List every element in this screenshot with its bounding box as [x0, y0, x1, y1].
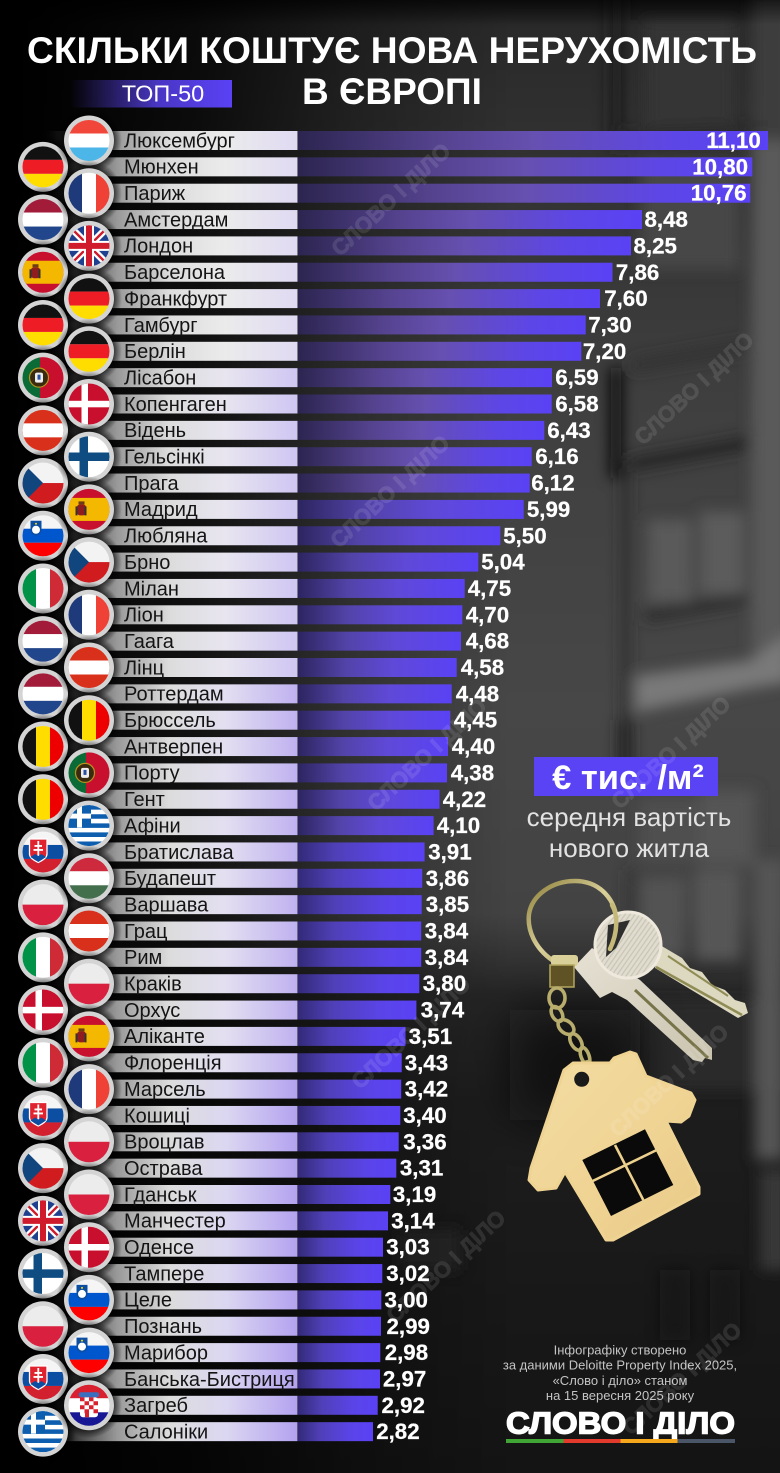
badge: ТОП-50: ТОП-50: [122, 81, 204, 107]
row: Гент: 4,22: [443, 787, 486, 812]
row: Прага: Прага: [124, 473, 179, 495]
flag: Denmark, Aarhus: [10, 977, 76, 1043]
row: Оденсе: [40, 1235, 430, 1260]
watermarks: СЛОВО І ДІЛО: [606, 691, 735, 814]
row: Тампере: 3,02: [386, 1261, 430, 1286]
clasp: [550, 955, 578, 987]
row: Мюнхен: Мюнхен: [124, 157, 199, 179]
row: Целе: Целе: [124, 1290, 172, 1312]
row: Лондон: [40, 233, 677, 258]
row: Любляна: Любляна: [124, 526, 208, 548]
badge: ТОП-50: [70, 80, 232, 108]
row: Ліон: 4,70: [466, 602, 509, 627]
row: Гент: Гент: [124, 789, 165, 811]
flag: Austria, Vienna: [10, 397, 76, 463]
row: Роттердам: Роттердам: [124, 684, 224, 706]
flag: Denmark, Copenhagen: [56, 371, 122, 437]
row: Вроцлав: [40, 1129, 447, 1154]
row: Лісабон: [40, 365, 599, 390]
flag: Poland, Gdansk: [56, 1162, 122, 1228]
flag: Poland, Krakow: [56, 951, 122, 1017]
flag: Belgium, Antwerp: [10, 714, 76, 780]
row: Марсель: Марсель: [124, 1079, 206, 1101]
flag: Spain, Madrid: [56, 476, 122, 542]
row: Париж: [40, 181, 750, 206]
row: Брюссель: [40, 708, 497, 733]
row: Братислава: [40, 839, 472, 864]
source note: «Слово і діло» станом: [553, 1373, 687, 1388]
row: Марибор: 2,98: [385, 1340, 428, 1365]
flag: Hungary, Budapest: [56, 845, 122, 911]
row: Варшава: [40, 892, 469, 917]
row: Краків: [40, 971, 466, 996]
row: Мілан: [40, 576, 511, 601]
row: Орхус: Орхус: [124, 1000, 180, 1022]
row: Люксембург: [40, 128, 768, 153]
row: Салоніки: [40, 1419, 420, 1444]
row: Берлін: Берлін: [124, 341, 186, 363]
unit badge: € тис. /м²: [552, 759, 704, 797]
flag: Germany, Frankfurt: [56, 266, 122, 332]
row: Марибор: Марибор: [124, 1342, 208, 1364]
source note: за даними Deloitte Property Index 2025,: [503, 1358, 737, 1372]
flag: Slovakia, Banska Bystrica: [10, 1346, 76, 1412]
row: Гент: [40, 787, 486, 812]
row: Познань: [40, 1314, 430, 1339]
flag: United Kingdom, London: [56, 213, 122, 279]
row: Лісабон: Лісабон: [124, 367, 196, 389]
row: Мілан: 4,75: [468, 576, 511, 601]
row: Флоренція: 3,43: [405, 1050, 448, 1075]
row: Будапешт: [40, 866, 469, 891]
row: Франкфурт: [40, 286, 648, 311]
row: Антверпен: 4,40: [452, 734, 495, 759]
row: Оденсе: Оденсе: [124, 1237, 194, 1259]
title: СКІЛЬКИ КОШТУЄ НОВА НЕРУХОМІСТЬ: [27, 29, 757, 71]
watermarks: СЛОВО І ДІЛО: [362, 693, 491, 816]
row: Банська-Бистриця: 2,97: [383, 1366, 426, 1391]
source note: на 15 вересня 2025 року: [546, 1388, 695, 1403]
flag: Spain, Barcelona: [10, 239, 76, 305]
flag: Poland, Warsaw: [10, 872, 76, 938]
flag: Italy, Florence: [10, 1030, 76, 1096]
row: Рим: [40, 945, 469, 970]
key: upper: [595, 912, 748, 1018]
flag: Germany, Hamburg: [10, 292, 76, 358]
unit caption: [527, 802, 731, 863]
watermarks: СЛОВО І ДІЛО: [617, 1317, 746, 1440]
row: Антверпен: Антверпен: [124, 736, 223, 758]
flag: Greece, Athens: [56, 793, 122, 859]
watermarks: СЛОВО І ДІЛО: [325, 430, 454, 553]
row: Кошиці: 3,40: [403, 1103, 447, 1128]
flag: Belgium, Brussels: [56, 687, 122, 753]
flag: Czechia, Prague: [10, 450, 76, 516]
row: Целе: [40, 1287, 428, 1312]
unit caption: нового житла: [549, 833, 710, 863]
row: Відень: Відень: [124, 420, 186, 442]
row: Марибор: [40, 1340, 428, 1365]
flag: Portugal, Porto: [56, 740, 122, 806]
row: Афіни: 4,10: [437, 813, 480, 838]
row: Варшава: Варшава: [124, 894, 209, 916]
row: Орхус: [40, 998, 465, 1023]
flag: France, Lyon: [56, 582, 122, 648]
flag: Slovenia, Maribor: [56, 1320, 122, 1386]
flag: France, Marseille: [56, 1056, 122, 1122]
source note: [503, 1342, 737, 1403]
row: Краків: 3,80: [423, 971, 466, 996]
row: Афіни: [40, 813, 480, 838]
row: Мюнхен: 10,80: [692, 154, 748, 179]
row: Мілан: Мілан: [124, 578, 179, 600]
row: Амстердам: 8,48: [644, 207, 688, 232]
key ring back: [529, 881, 617, 960]
row: Рим: Рим: [124, 947, 162, 969]
row: Марсель: 3,42: [405, 1077, 448, 1102]
flag: Greece, Thessaloniki: [10, 1399, 76, 1465]
flag: United Kingdom, Manchester: [10, 1188, 76, 1254]
row: Аліканте: Аліканте: [124, 1026, 205, 1048]
flag: Belgium, Ghent: [10, 766, 76, 832]
row: Вроцлав: Вроцлав: [124, 1132, 204, 1154]
row: Кошиці: Кошиці: [124, 1105, 190, 1127]
row: Гельсінкі: [40, 444, 579, 469]
row: Острава: [40, 1156, 443, 1181]
row: Аліканте: 3,51: [409, 1024, 452, 1049]
row: Афіни: Афіни: [124, 815, 181, 837]
row: Тампере: Тампере: [124, 1263, 204, 1285]
flag: Finland, Tampere: [10, 1241, 76, 1307]
row: Гамбург: Гамбург: [124, 315, 198, 337]
flag: Finland, Helsinki: [56, 424, 122, 490]
row: Рим: 3,84: [425, 945, 469, 970]
row: Оденсе: 3,03: [386, 1235, 430, 1260]
key: lower: [574, 948, 712, 1062]
watermarks: СЛОВО І ДІЛО: [381, 1205, 510, 1328]
row: Роттердам: 4,48: [456, 681, 499, 706]
row: Мадрид: [40, 497, 570, 522]
flag: Slovenia, Celje: [56, 1267, 122, 1333]
row: Флоренція: Флоренція: [124, 1053, 222, 1075]
flag: France, Paris: [56, 160, 122, 226]
flag: Poland, Poznan: [10, 1293, 76, 1359]
row: Люксембург: Люксембург: [124, 130, 235, 152]
row: Франкфурт: Франкфурт: [124, 288, 227, 310]
row: Амстердам: Амстердам: [124, 209, 228, 231]
flag: Slovakia, Kosice: [10, 1082, 76, 1148]
row: Целе: 3,00: [384, 1287, 428, 1312]
title: В ЄВРОПІ: [302, 71, 482, 112]
row: Копенгаген: Копенгаген: [124, 394, 227, 416]
row: Братислава: 3,91: [428, 839, 472, 864]
row: Познань: 2,99: [386, 1314, 430, 1339]
row: Загреб: 2,92: [381, 1393, 425, 1418]
row: Лісабон: 6,59: [555, 365, 599, 390]
row: Гданськ: Гданськ: [124, 1184, 197, 1206]
wooden house tag: [529, 1052, 699, 1240]
row: Прага: [40, 471, 575, 496]
row: Марсель: [40, 1077, 448, 1102]
row: Кошиці: [40, 1103, 447, 1128]
row: Відень: 6,43: [547, 418, 591, 443]
row: Аліканте: [40, 1024, 452, 1049]
row: Варшава: 3,85: [426, 892, 469, 917]
row: Берлін: 7,20: [583, 339, 626, 364]
watermarks: СЛОВО І ДІЛО: [604, 1019, 733, 1142]
watermarks: [325, 138, 758, 1440]
row: Брно: 5,04: [481, 550, 525, 575]
flag: Italy, Milan: [10, 555, 76, 621]
flags: left column: [10, 134, 76, 1465]
row: Тампере: [40, 1261, 430, 1286]
watermarks: СЛОВО І ДІЛО: [629, 327, 758, 450]
row: Гамбург: [40, 312, 632, 337]
row: Грац: [40, 918, 469, 944]
row: Грац: Грац: [124, 921, 167, 943]
row: Манчестер: 3,14: [391, 1208, 435, 1233]
row: Острава: Острава: [124, 1158, 203, 1180]
row: Роттердам: [40, 681, 499, 706]
chain: [549, 988, 592, 1075]
row: Манчестер: Манчестер: [124, 1211, 226, 1233]
row: Франкфурт: 7,60: [604, 286, 648, 311]
row: Париж: Париж: [124, 183, 186, 205]
row: Барселона: [40, 260, 659, 285]
row: Любляна: [40, 523, 547, 548]
row: Брно: [40, 550, 525, 575]
row: Гданськ: 3,19: [393, 1182, 436, 1207]
row: Брюссель: Брюссель: [124, 710, 216, 732]
flag: Slovakia, Bratislava: [10, 819, 76, 885]
row: Лондон: Лондон: [124, 236, 193, 258]
flag: Netherlands, The Hague: [10, 608, 76, 674]
row: Барселона: Барселона: [124, 262, 226, 284]
row: Будапешт: Будапешт: [124, 868, 216, 890]
row: Загреб: [40, 1393, 425, 1418]
row: Острава: 3,31: [400, 1156, 443, 1181]
row: Брно: Брно: [124, 552, 170, 574]
watermarks: СЛОВО І ДІЛО: [346, 971, 475, 1094]
row: Копенгаген: [40, 392, 599, 416]
row: Берлін: [40, 339, 626, 364]
row: Банська-Бистриця: [40, 1366, 426, 1391]
flag: Germany, Berlin: [56, 318, 122, 384]
row: Люксембург: 11,10: [706, 128, 761, 153]
title: [27, 29, 757, 112]
flag: Austria, Linz: [56, 634, 122, 700]
row: Будапешт: 3,86: [426, 866, 469, 891]
row: Лондон: 8,25: [633, 233, 677, 258]
row: Лінц: [40, 655, 504, 680]
row: Салоніки: Салоніки: [124, 1421, 208, 1443]
row: Познань: Познань: [124, 1316, 202, 1338]
row: Гаага: [40, 629, 509, 654]
row: Гаага: Гаага: [124, 631, 175, 653]
flag: Netherlands, Rotterdam: [10, 661, 76, 727]
row: Брюссель: 4,45: [454, 708, 497, 733]
row: Флоренція: [40, 1050, 448, 1075]
unit caption: середня вартість: [527, 802, 731, 832]
row: Копенгаген: 6,58: [555, 392, 599, 416]
flag: Czechia, Brno: [56, 529, 122, 595]
logo: Слово і діло: СЛОВО І ДІЛО: [506, 1406, 735, 1440]
row: Порту: Порту: [124, 763, 180, 785]
flag: Slovenia, Ljubljana: [10, 503, 76, 569]
row: Грац: 3,84: [425, 918, 469, 944]
row: Порту: [40, 760, 494, 785]
row: Краків: Краків: [124, 974, 182, 996]
row: Мюнхен: [40, 154, 752, 179]
key ring front: [610, 905, 616, 949]
row: Лінц: 4,58: [461, 655, 504, 680]
watermarks: СЛОВО І ДІЛО: [326, 138, 455, 261]
row: Салоніки: 2,82: [376, 1419, 420, 1444]
row: Лінц: Лінц: [124, 657, 164, 679]
row: Ліон: Ліон: [124, 605, 164, 627]
flag: Poland, Wroclaw: [56, 1109, 122, 1175]
row: Гаага: 4,68: [466, 629, 509, 654]
row: Амстердам: [40, 207, 688, 232]
flag: Spain, Alicante: [56, 1003, 122, 1069]
flags: right column: [56, 108, 122, 1438]
flag: Netherlands, Amsterdam: [10, 187, 76, 253]
flag: Italy, Rome: [10, 924, 76, 990]
row: Порту: 4,38: [451, 760, 494, 785]
flag: Austria, Graz: [56, 898, 122, 964]
flag: Germany, Munich: [10, 134, 76, 200]
flag: Luxembourg: [56, 108, 122, 174]
row: Мадрид: Мадрид: [124, 499, 198, 521]
flag: Denmark, Odense: [56, 1214, 122, 1280]
row: Антверпен: [40, 734, 495, 759]
source note: Інфографіку створено: [554, 1342, 686, 1358]
row: Ліон: [40, 602, 509, 627]
row: Любляна: 5,50: [503, 523, 547, 548]
row: Гамбург: 7,30: [588, 312, 632, 337]
row: Банська-Бистриця: Банська-Бистриця: [124, 1369, 295, 1391]
flag: Croatia, Zagreb: [56, 1372, 122, 1438]
row: Гельсінкі: Гельсінкі: [124, 447, 205, 469]
row: Відень: [40, 418, 591, 443]
flag: Czechia, Ostrava: [10, 1135, 76, 1201]
row: Прага: 6,12: [531, 471, 575, 496]
row: Гданськ: [40, 1182, 436, 1207]
illustration: keys with a wooden house keychain: [529, 881, 748, 1240]
row: Гельсінкі: 6,16: [535, 444, 579, 469]
row: Барселона: 7,86: [616, 260, 659, 285]
row: Загреб: Загреб: [124, 1395, 188, 1417]
row: Манчестер: [40, 1208, 435, 1233]
row: Орхус: 3,74: [421, 998, 465, 1023]
row: Братислава: Братислава: [124, 842, 234, 864]
flag: Portugal, Lisbon: [10, 345, 76, 411]
row: Мадрид: 5,99: [527, 497, 570, 522]
row: Вроцлав: 3,36: [403, 1129, 447, 1154]
row: Париж: 10,76: [691, 181, 746, 206]
